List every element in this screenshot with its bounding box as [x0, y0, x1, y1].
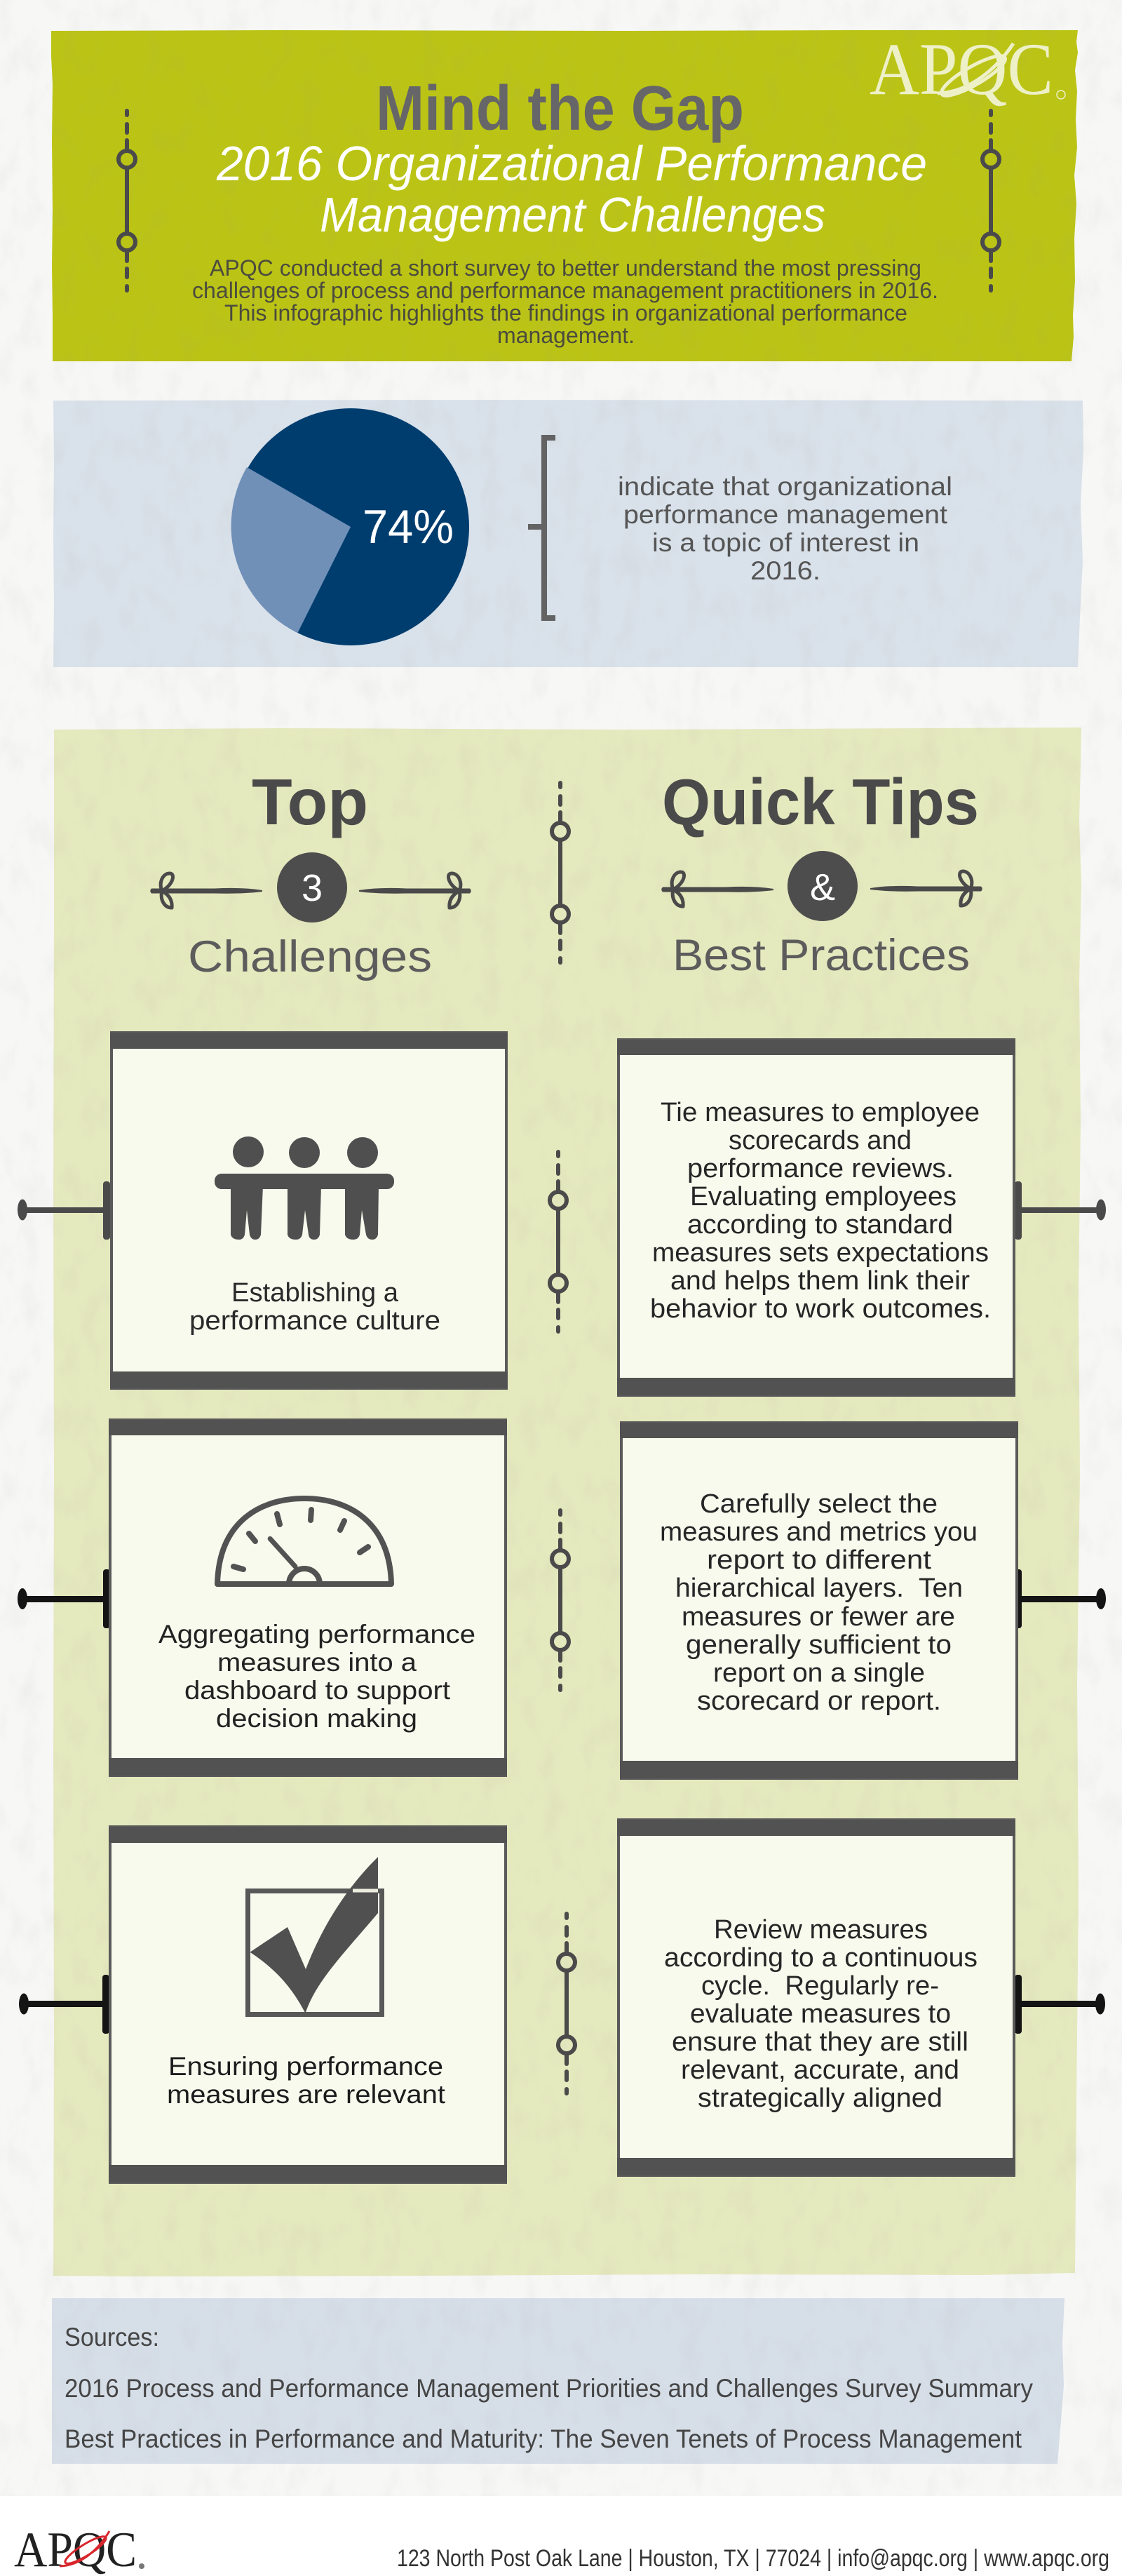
text block: tip 2: report to different — [707, 1545, 931, 1575]
text block: tip 3: Review measures — [714, 1915, 928, 1945]
text block: sources: Sources: — [65, 2323, 159, 2352]
text block: statistic description: 2016. — [750, 556, 820, 585]
text block: tip 1: behavior to work outcomes. — [650, 1294, 991, 1324]
text block: introduction: APQC conducted a short survey to better understand the most pressing — [210, 255, 921, 281]
text block: challenge 2 label: measures into a — [217, 1648, 417, 1677]
subtitle: 2016 challenges — [216, 136, 927, 242]
subtitle: 2016 challenges: 2016 Organizational Performance — [216, 136, 927, 191]
icon: row 2 divider — [552, 1510, 569, 1690]
text block: tip 1: Tie measures to employee — [661, 1098, 980, 1127]
text block: tip 3: relevant, accurate, and — [681, 2055, 959, 2085]
heading: Top 3 Challenges: Top — [252, 765, 368, 838]
heading: Quick Tips and Best Practices: & — [810, 866, 835, 908]
heading: Quick Tips and Best Practices — [661, 765, 982, 980]
text block: tip 1: Evaluating employees — [690, 1182, 957, 1212]
icon: hanger left row 1 — [18, 1181, 110, 1240]
panel: tip 3 — [617, 1820, 1015, 2175]
icon: hanger right row 1 — [1015, 1181, 1106, 1240]
text block: challenge 1 label — [189, 1278, 440, 1336]
text block: introduction: This infographic highlights the findings in organizational performance — [224, 300, 907, 326]
text block: statistic description: performance management — [623, 500, 948, 529]
icon: heading divider — [552, 783, 569, 962]
icon: three people — [215, 1136, 394, 1240]
text block: sources: Best Practices in Performance and Maturity: The Seven Tenets of Process Management — [65, 2424, 1022, 2453]
text block: tip 2: generally sufficient to — [686, 1630, 952, 1660]
icon: APQC logo (light): APQC — [870, 28, 1053, 110]
text block: tip 3: ensure that they are still — [672, 2027, 968, 2057]
icon: header divider left — [119, 111, 135, 290]
text block: tip 1: scorecards and — [729, 1126, 912, 1155]
panel: header banner — [51, 30, 1078, 361]
pie chart: 74%: 74% — [363, 500, 454, 554]
text block: sources — [65, 2323, 1033, 2453]
text block: tip 1: measures sets expectations — [652, 1238, 989, 1268]
heading: Top 3 Challenges — [150, 765, 471, 981]
text block: statistic description: indicate that organizational — [618, 472, 952, 501]
text block: tip 3: strategically aligned — [698, 2084, 942, 2113]
icon: checkbox with check mark — [248, 1857, 381, 2015]
icon: dashboard gauge — [217, 1498, 391, 1584]
pie chart: 74% — [231, 408, 469, 645]
heading: Quick Tips and Best Practices: Quick Tips — [662, 765, 979, 838]
text block: challenge 3 label: measures are relevant — [167, 2080, 446, 2109]
panel: tip 2 — [620, 1423, 1018, 1778]
icon: APQC logo (footer): APQC — [14, 2523, 137, 2576]
text block: challenge 2 label: dashboard to support — [184, 1676, 451, 1705]
text block: challenge 2 label: Aggregating performance — [158, 1620, 475, 1649]
title: Mind the Gap: Mind the Gap — [376, 74, 744, 144]
heading: Quick Tips and Best Practices: Best Practices — [672, 931, 970, 980]
panel: challenge 3 — [109, 1827, 507, 2182]
text block: challenge 3 label: Ensuring performance — [168, 2052, 443, 2081]
text block: statistic description — [618, 472, 952, 585]
heading: Top 3 Challenges: 3 — [302, 867, 323, 909]
panel: tip 1 — [617, 1040, 1015, 1395]
text block: tip 2: measures and metrics you — [660, 1517, 978, 1547]
icon: hanger left row 3 — [19, 1975, 109, 2034]
panel: statistic — [53, 400, 1083, 667]
panel: challenge 1 — [110, 1033, 508, 1388]
icon: hanger right row 2 — [1015, 1569, 1106, 1628]
icon: bracket — [528, 438, 555, 618]
text block: tip 2: report on a single — [713, 1658, 925, 1688]
text block: tip 1: according to standard — [687, 1210, 953, 1240]
text block: tip 3 — [664, 1915, 978, 2113]
panel: sources background — [52, 2298, 1064, 2464]
text block: tip 3: cycle. Regularly re- — [701, 1971, 939, 2001]
icon: hanger left row 2 — [18, 1569, 110, 1628]
text block: introduction — [192, 255, 938, 348]
text block: tip 1: and helps them link their — [670, 1266, 970, 1296]
icon: row 3 divider — [558, 1914, 575, 2093]
subtitle: 2016 challenges: Management Challenges — [320, 187, 825, 242]
text block: tip 2: measures or fewer are — [682, 1602, 955, 1632]
panel: challenge 2 — [109, 1420, 507, 1776]
text block: introduction: challenges of process and performance management practitioners in 2016. — [192, 278, 938, 303]
text block: tip 2: Carefully select the — [700, 1489, 938, 1519]
text block: tip 1 — [650, 1098, 991, 1324]
text block: tip 2: scorecard or report. — [697, 1686, 941, 1716]
text block: challenge 1 label: Establishing a — [231, 1278, 399, 1308]
text block: tip 2: hierarchical layers. Ten — [675, 1574, 963, 1603]
text block: statistic description: is a topic of interest in — [652, 528, 919, 557]
text block: challenge 3 label — [167, 2052, 446, 2109]
text block: introduction: management. — [497, 323, 635, 348]
panel: challenges and tips background — [53, 727, 1081, 2276]
text block: tip 3: evaluate measures to — [690, 1999, 951, 2029]
text block: challenge 2 label — [158, 1620, 475, 1733]
text block: tip 1: performance reviews. — [687, 1154, 954, 1183]
text block: sources: 2016 Process and Performance Management Priorities and Challenges Survey Summary — [65, 2374, 1033, 2403]
text block: tip 2 — [660, 1489, 978, 1716]
icon: header divider right — [982, 111, 999, 290]
text block: challenge 2 label: decision making — [216, 1704, 417, 1733]
icon: hanger right row 3 — [1015, 1975, 1105, 2034]
text block: challenge 1 label: performance culture — [189, 1306, 440, 1336]
heading: Top 3 Challenges: Challenges — [188, 932, 432, 981]
icon: row 1 divider — [550, 1152, 567, 1331]
text block: tip 3: according to a continuous — [664, 1943, 978, 1973]
